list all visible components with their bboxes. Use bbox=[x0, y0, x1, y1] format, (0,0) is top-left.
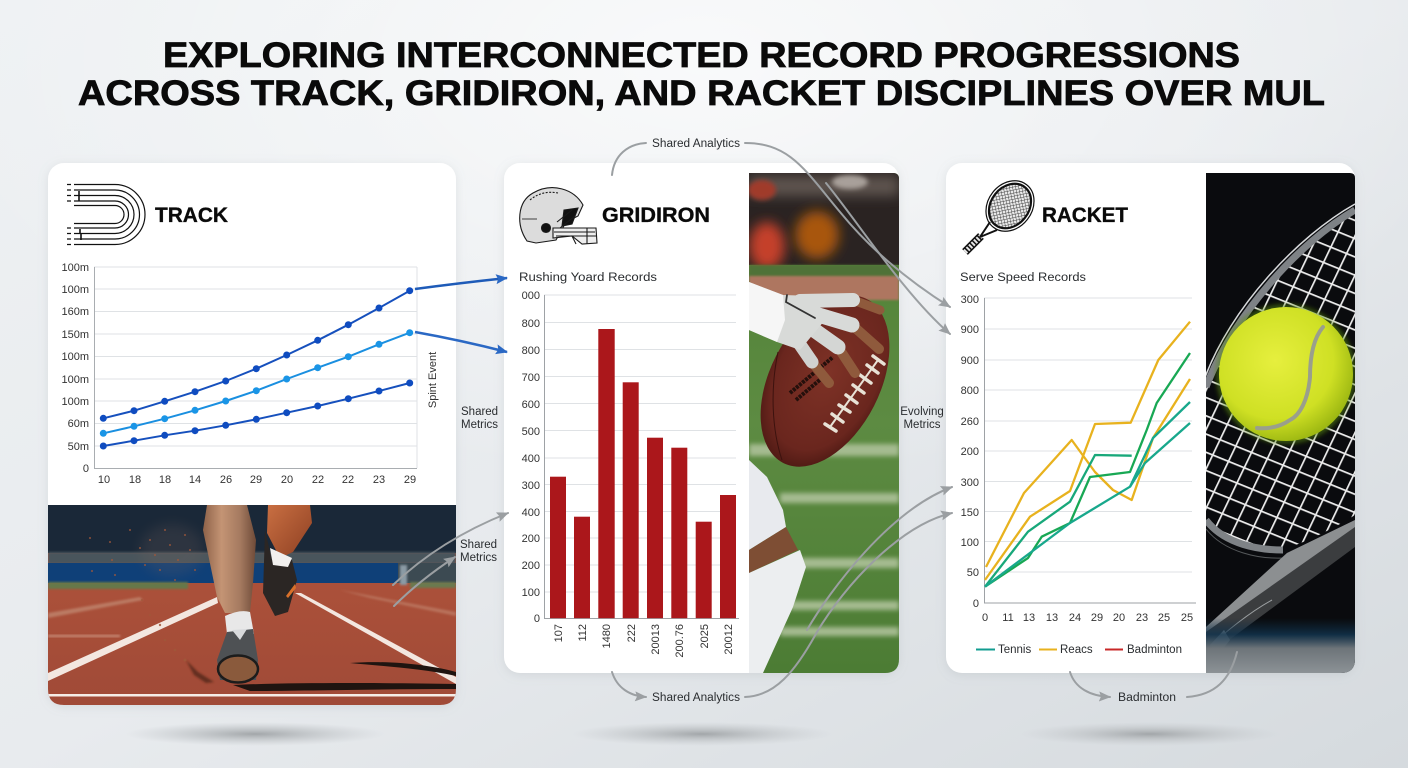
heading: track: TRACK bbox=[155, 204, 228, 227]
line chart: sprint records: 18 bbox=[129, 474, 141, 486]
label: shared metrics upper: Metrics bbox=[461, 419, 498, 431]
line chart: serve speeds: 260 bbox=[961, 416, 979, 428]
connector: shared analytics top bbox=[612, 138, 950, 334]
bar chart: rushing yards: 200 bbox=[522, 533, 540, 545]
line chart: sprint records: 23 bbox=[373, 474, 385, 486]
line chart: serve speeds: 900 bbox=[961, 324, 979, 336]
line chart: serve speeds: 800 bbox=[961, 385, 979, 397]
line chart: serve speeds: 11 bbox=[1002, 612, 1014, 624]
line chart: serve speeds: 150 bbox=[961, 507, 979, 519]
gloved hand bbox=[749, 282, 880, 383]
bar chart: rushing yards: 222 bbox=[626, 624, 638, 642]
bar chart: rushing yards: 800 bbox=[522, 345, 540, 357]
bar chart: rushing yards: 2025 bbox=[699, 624, 711, 648]
label: evolving metrics: Evolving bbox=[900, 406, 944, 418]
chart title: serve speed records: Serve Speed Records bbox=[960, 272, 1086, 284]
icon: running track bbox=[67, 184, 145, 245]
line chart: sprint records: 100m bbox=[61, 351, 89, 363]
bar chart: rushing yards: 107 bbox=[553, 624, 565, 642]
bar chart: rushing yards: 300 bbox=[522, 480, 540, 492]
line chart: serve speeds: 900 bbox=[961, 355, 979, 367]
line chart: sprint records: 100m bbox=[61, 396, 89, 408]
connector: shared analytics bottom: Shared Analytics bbox=[652, 692, 740, 704]
line chart: serve speeds: 29 bbox=[1091, 612, 1103, 624]
legend: Badminton bbox=[1127, 644, 1182, 656]
line chart: sprint records: 20 bbox=[281, 474, 293, 486]
label: evolving metrics: Metrics bbox=[903, 419, 941, 431]
line chart: serve speeds: 100 bbox=[961, 537, 979, 549]
title bbox=[78, 35, 1325, 113]
panel: gridiron bbox=[504, 163, 916, 673]
bar chart: rushing yards: 200 bbox=[522, 560, 540, 572]
legend bbox=[976, 644, 1182, 656]
bar chart: rushing yards: 100 bbox=[522, 587, 540, 599]
series: bottom bbox=[100, 380, 413, 450]
label: shared metrics lower: Metrics bbox=[460, 552, 497, 564]
connector: badminton bottom: Badminton bbox=[1118, 692, 1176, 704]
series: middle bbox=[100, 329, 413, 437]
photo: tennis ball on racket bbox=[1206, 173, 1355, 673]
football bbox=[760, 296, 890, 467]
line chart: serve speeds: 24 bbox=[1069, 612, 1081, 624]
line chart: sprint records: 22 bbox=[342, 474, 354, 486]
bar chart: rushing yards: 800 bbox=[522, 318, 540, 330]
line chart: serve speeds: 0 bbox=[973, 598, 979, 610]
line chart: serve speeds: 20 bbox=[1113, 612, 1125, 624]
bar chart: rushing yards: 20012 bbox=[723, 624, 735, 655]
panel: track bbox=[48, 163, 498, 705]
connector: shared analytics top: Shared Analytics bbox=[652, 138, 740, 150]
line chart: serve speeds: 300 bbox=[961, 294, 979, 306]
bar chart: rushing yards bbox=[522, 290, 739, 658]
legend: Reacs bbox=[1060, 644, 1093, 656]
bar chart: rushing yards: 500 bbox=[522, 426, 540, 438]
icon: football helmet bbox=[520, 188, 597, 244]
chart title: rushing yard records: Rushing Yoard Records bbox=[519, 272, 657, 284]
line chart: sprint records: 18 bbox=[159, 474, 171, 486]
dirt streak bbox=[186, 660, 214, 683]
line chart: sprint records: 29 bbox=[404, 474, 416, 486]
icon: tennis racket bbox=[965, 171, 1044, 252]
line chart: sprint records: 14 bbox=[189, 474, 201, 486]
line chart: serve speeds: 300 bbox=[961, 477, 979, 489]
line chart: sprint records: 29 bbox=[250, 474, 262, 486]
label: shared metrics lower: Shared bbox=[460, 539, 497, 551]
label: shared metrics upper: Shared bbox=[461, 406, 498, 418]
photo: runner on track bbox=[48, 505, 456, 705]
bar chart: rushing yards: 0 bbox=[534, 613, 540, 625]
bar chart: rushing yards: 1480 bbox=[601, 624, 613, 648]
bar chart: rushing yards: 400 bbox=[522, 453, 540, 465]
series: top bbox=[100, 287, 413, 422]
connector: shared analytics bottom bbox=[612, 487, 952, 704]
line chart: sprint records: 0 bbox=[83, 463, 89, 475]
bar chart: rushing yards: 600 bbox=[522, 399, 540, 411]
line chart: sprint records: 100m bbox=[61, 284, 89, 296]
line chart: sprint records: 26 bbox=[220, 474, 232, 486]
line chart: sprint records: 50m bbox=[68, 441, 89, 453]
bar chart: rushing yards: 20013 bbox=[650, 624, 662, 655]
runner legs and shoes bbox=[203, 505, 312, 682]
bar chart: rushing yards: 112 bbox=[577, 624, 589, 642]
line chart: serve speeds bbox=[961, 294, 1196, 656]
panel: racket bbox=[946, 163, 1356, 673]
heading: racket: RACKET bbox=[1042, 204, 1128, 227]
connector: blue arrow upper bbox=[415, 278, 507, 289]
line chart: serve speeds: 25 bbox=[1181, 612, 1193, 624]
line chart: sprint records: 60m bbox=[68, 418, 89, 430]
player torso and pants bbox=[749, 460, 806, 673]
tennis ball bbox=[1216, 304, 1356, 444]
title: EXPLORING INTERCONNECTED RECORD PROGRESSIONS bbox=[163, 35, 1240, 75]
series: lines bbox=[985, 322, 1190, 587]
photo: football in hand bbox=[749, 173, 899, 673]
dirt spray bbox=[89, 529, 196, 662]
axis label: sprint event: Spint Event bbox=[427, 352, 439, 408]
line chart: serve speeds: 25 bbox=[1158, 612, 1170, 624]
connector: grey arrow shared metrics lower bbox=[394, 557, 455, 606]
legend: Tennis bbox=[998, 644, 1031, 656]
title: ACROSS TRACK, GRIDIRON, AND RACKET DISCIPLINES OVER MUL bbox=[78, 73, 1325, 113]
line chart: serve speeds: 13 bbox=[1046, 612, 1058, 624]
line chart: sprint records: 22 bbox=[312, 474, 324, 486]
line chart: serve speeds: 50 bbox=[967, 567, 979, 579]
bar chart: rushing yards: 200.76 bbox=[674, 624, 686, 658]
line chart: sprint records bbox=[61, 262, 439, 486]
line chart: sprint records: 10 bbox=[98, 474, 110, 486]
line chart: serve speeds: 13 bbox=[1023, 612, 1035, 624]
bar chart: rushing yards: 700 bbox=[522, 372, 540, 384]
line chart: serve speeds: 0 bbox=[982, 612, 988, 624]
heading: gridiron: GRIDIRON bbox=[602, 204, 710, 227]
line chart: serve speeds: 23 bbox=[1136, 612, 1148, 624]
bar chart: rushing yards: 000 bbox=[522, 290, 540, 302]
line chart: sprint records: 150m bbox=[61, 329, 89, 341]
connector: blue arrow lower bbox=[415, 332, 507, 352]
line chart: sprint records: 100m bbox=[61, 374, 89, 386]
line chart: sprint records: 160m bbox=[61, 306, 89, 318]
bar chart: rushing yards: 400 bbox=[522, 507, 540, 519]
connector: badminton bottom bbox=[1070, 652, 1237, 704]
connector: grey arrow shared metrics upper bbox=[393, 513, 508, 585]
line chart: sprint records: 100m bbox=[61, 262, 89, 274]
line chart: serve speeds: 200 bbox=[961, 446, 979, 458]
